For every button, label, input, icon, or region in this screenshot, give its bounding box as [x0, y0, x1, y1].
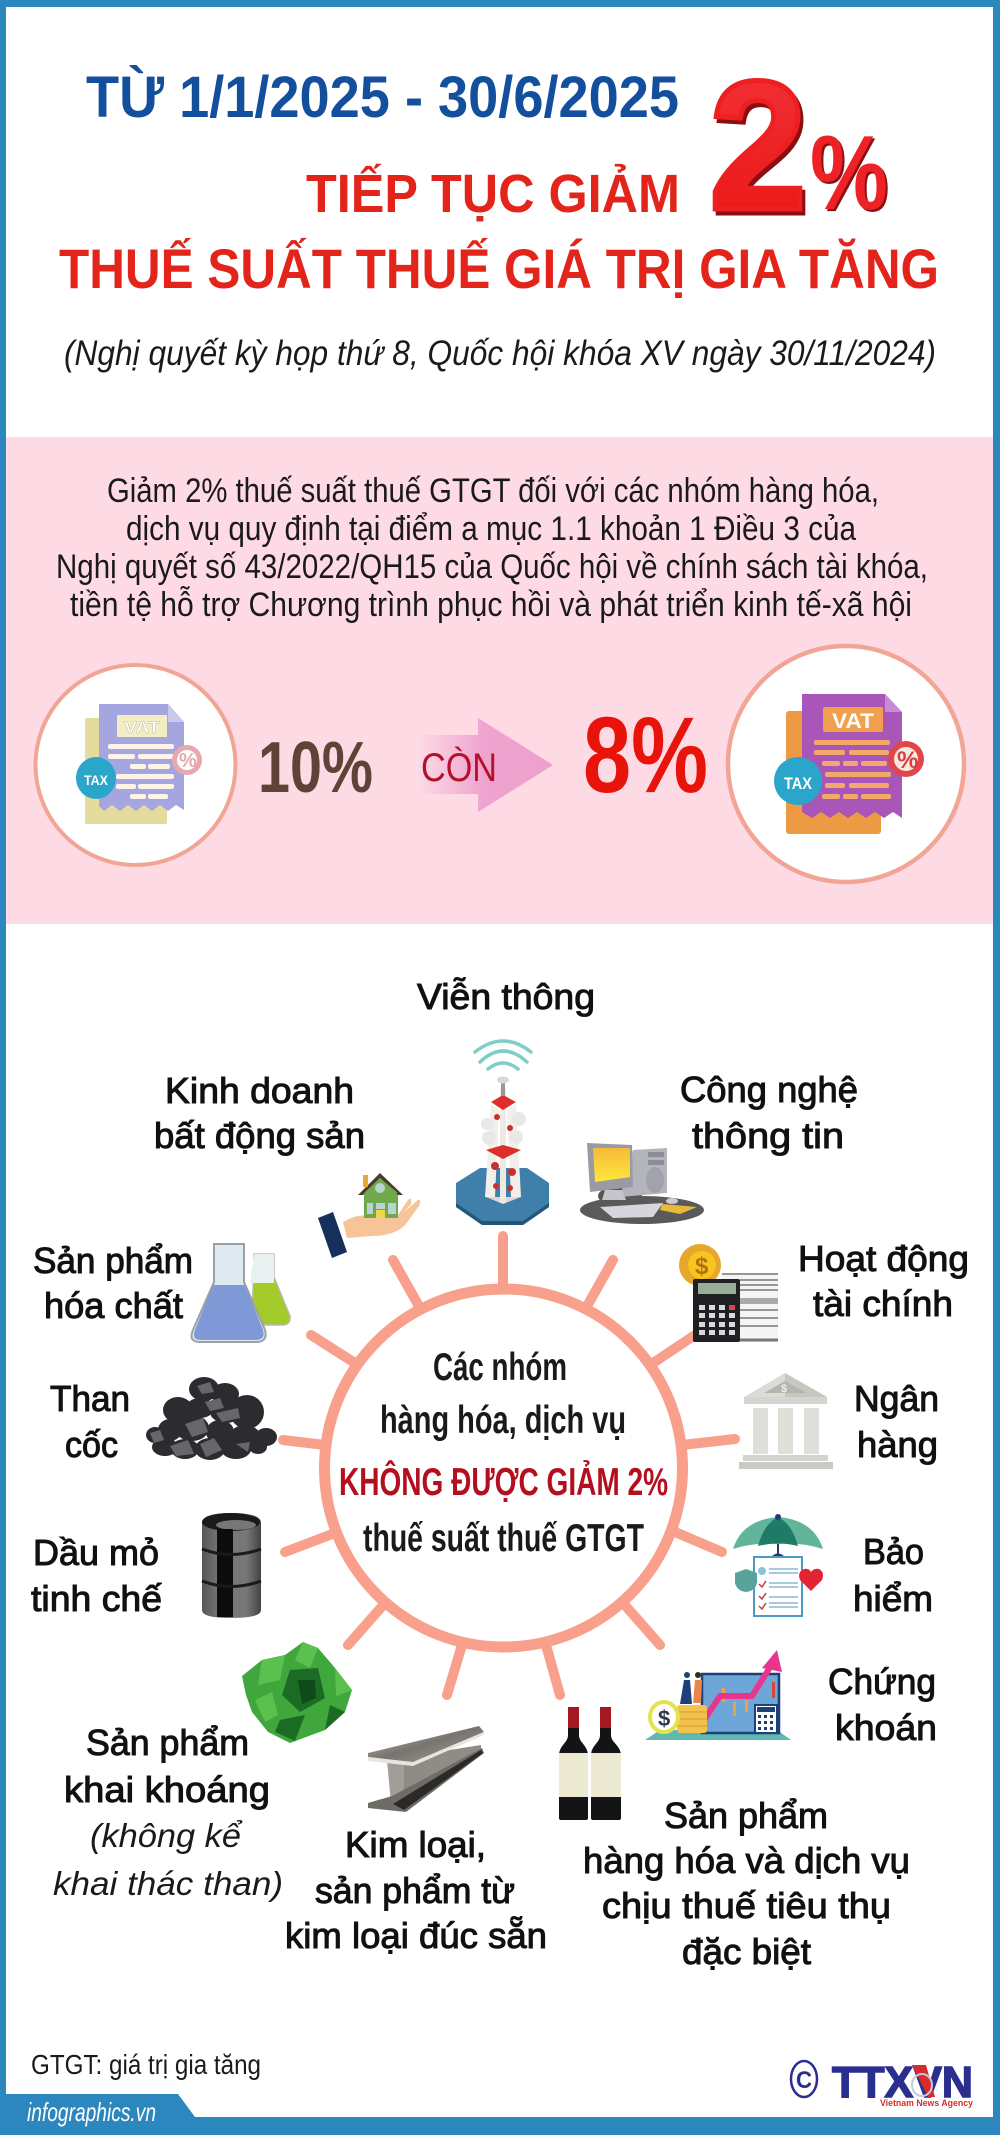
label: Than cốc: Than [50, 1378, 130, 1419]
value: 8%: 8% [583, 694, 708, 815]
icon: telecom tower [456, 1041, 549, 1225]
label: Kim loại sản phẩm từ kim loại đúc sẵn [285, 1824, 547, 1956]
arrow: còn: CÒN [421, 745, 497, 790]
label: Công nghệ thông tin: thông tin [692, 1115, 844, 1156]
label: Sản phẩm hóa chất: hóa chất [44, 1285, 183, 1326]
label: Than cốc [50, 1378, 130, 1465]
text block: circle caption: hàng hóa, dịch vụ [380, 1399, 626, 1442]
icon: bank building [739, 1373, 833, 1469]
icon: purple VAT document in circle: % [897, 747, 918, 774]
label: Kim loại sản phẩm từ kim loại đúc sẵn: Kim loại, [345, 1824, 486, 1865]
icon: finance calculator [679, 1244, 778, 1342]
icon: oil barrel [202, 1513, 261, 1618]
icon: pale VAT document in circle [36, 665, 236, 865]
text block: circle caption: Các nhóm [433, 1346, 567, 1389]
title: date range: TỪ 1/1/2025 - 30/6/2025 [86, 65, 679, 130]
icon: purple VAT document in circle: VAT [832, 710, 874, 733]
text block: summary paragraph [56, 472, 928, 624]
label: Viễn thông: Viễn thông [417, 976, 595, 1017]
logo: TTXVN: C [796, 2067, 812, 2094]
icon: pale VAT document in circle: % [179, 750, 197, 772]
label: special consumption goods: đặc biệt [682, 1931, 811, 1972]
icon: green mineral [242, 1642, 352, 1743]
label: Chứng khoán: Chứng [828, 1661, 936, 1702]
label: Dầu mỏ tinh chế: tinh chế [31, 1578, 162, 1619]
text block: summary paragraph: tiền tệ hỗ trợ Chương trình phục hồi và phát triển kinh tế-xã hội [70, 586, 912, 624]
label: Sản phẩm khai khoáng: khai thác than) [53, 1865, 283, 1902]
label: Ngân hàng: hàng [857, 1424, 938, 1465]
text block: circle caption [339, 1346, 668, 1560]
diagram: central circle with spokes [283, 1236, 735, 1695]
label: Hoạt động tài chính [798, 1238, 969, 1324]
label: Sản phẩm khai khoáng [53, 1722, 283, 1902]
panel: pink summary [6, 437, 994, 924]
icon: desktop computer [580, 1143, 704, 1224]
label: Bảo hiểm [853, 1531, 933, 1619]
title: big 2%: % [812, 116, 890, 234]
icon: wine bottles [559, 1707, 621, 1820]
label: Ngân hàng [854, 1378, 939, 1465]
footnote: GTGT: giá trị gia tăng [31, 2049, 261, 2080]
icon: steel beam [368, 1726, 484, 1812]
label: Chứng khoán [828, 1661, 937, 1748]
title: continue to reduce: TIẾP TỤC GIẢM [306, 164, 680, 224]
title: big 2%: % [810, 114, 888, 232]
text block: summary paragraph: Giảm 2% thuế suất thuế GTGT đối với các nhóm hàng hóa, [107, 472, 879, 510]
label: Than cốc: cốc [65, 1424, 118, 1465]
label: Công nghệ thông tin [680, 1069, 858, 1156]
icon: purple VAT document in circle: TAX [784, 774, 813, 793]
label: special consumption goods: Sản phẩm [664, 1795, 828, 1836]
logo: TTXVN: Vietnam News Agency [880, 2098, 973, 2108]
title: big 2%: 2 [712, 46, 810, 252]
label: Kim loại sản phẩm từ kim loại đúc sẵn: sản phẩm từ [315, 1870, 515, 1911]
label: Dầu mỏ tinh chế [31, 1532, 162, 1619]
label: Hoạt động tài chính: Hoạt động [798, 1238, 969, 1279]
label: special consumption goods: chịu thuế tiêu thụ [602, 1885, 891, 1926]
label: Sản phẩm khai khoáng: (không kể [90, 1817, 243, 1854]
icon: coal pile [146, 1377, 277, 1460]
label: Bảo hiểm: Bảo [863, 1531, 924, 1572]
label: special consumption goods: hàng hóa và dịch vụ [583, 1840, 910, 1881]
label: Sản phẩm hóa chất: Sản phẩm [33, 1240, 193, 1281]
label: Sản phẩm hóa chất [33, 1240, 193, 1326]
label: Sản phẩm khai khoáng: Sản phẩm [86, 1722, 249, 1763]
subtitle: resolution reference: (Nghị quyết kỳ họp thứ 8, Quốc hội khóa XV ngày 30/11/2024) [64, 334, 936, 373]
icon: chemical flasks [192, 1244, 290, 1342]
icon: bank building: $ [781, 1383, 787, 1395]
icon: stock chart: $ [658, 1706, 670, 1731]
label: Dầu mỏ tinh chế: Dầu mỏ [33, 1532, 159, 1573]
icon: insurance umbrella and clipboard [733, 1514, 823, 1616]
arrow: còn [415, 718, 553, 812]
label: Ngân hàng: Ngân [854, 1378, 939, 1419]
label: Kinh doanh bất động sản [154, 1070, 365, 1156]
icon: pale VAT document in circle: VAT [124, 718, 161, 737]
label: Kinh doanh bất động sản: bất động sản [154, 1115, 365, 1156]
label: Bảo hiểm: hiểm [853, 1578, 933, 1619]
label: Hoạt động tài chính: tài chính [813, 1283, 953, 1324]
text block: circle caption: KHÔNG ĐƯỢC GIẢM 2% [339, 1459, 668, 1504]
label: Chứng khoán: khoán [835, 1707, 937, 1748]
label: Kim loại sản phẩm từ kim loại đúc sẵn: kim loại đúc sẵn [285, 1915, 547, 1956]
icon: purple VAT document in circle [728, 646, 964, 882]
icon: finance calculator: $ [695, 1253, 709, 1280]
label: special consumption goods [583, 1795, 910, 1972]
text block: circle caption: thuế suất thuế GTGT [363, 1517, 644, 1560]
title: big 2% [709, 42, 890, 252]
label: Kinh doanh bất động sản: Kinh doanh [165, 1070, 354, 1111]
icon: pale VAT document in circle: TAX [84, 772, 109, 788]
value: 10%: 10% [258, 728, 373, 808]
icon: stock chart [645, 1650, 791, 1740]
logo: TTXVN: TTXVN [832, 2058, 973, 2107]
title: big 2%: 2 [709, 42, 807, 248]
label: Sản phẩm khai khoáng: khai khoáng [64, 1769, 270, 1810]
text block: summary paragraph: dịch vụ quy định tại điểm a mục 1.1 khoản 1 Điều 3 của [126, 510, 856, 548]
icon: house on hand [318, 1173, 420, 1258]
label: Công nghệ thông tin: Công nghệ [680, 1069, 858, 1110]
source: infographics.vn: infographics.vn [27, 2097, 156, 2127]
